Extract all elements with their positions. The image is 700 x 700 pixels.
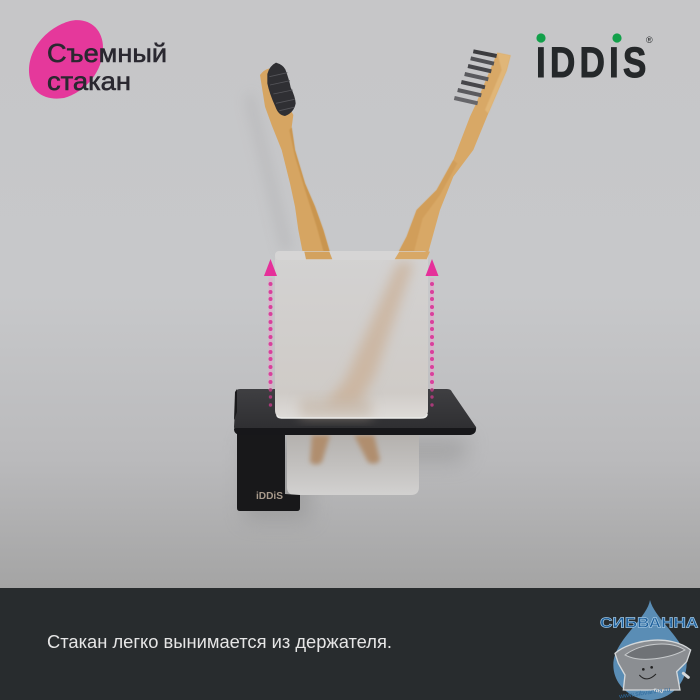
frosted glass upper part (275, 251, 428, 418)
brand logo: IDDIS: ® (646, 35, 653, 45)
toothbrush left (260, 63, 332, 261)
wall bracket (237, 433, 300, 511)
footer band (0, 588, 700, 700)
glass rim and wood stems at rim (275, 251, 430, 260)
pink blob accent (29, 20, 103, 99)
heading: Съемный (47, 38, 167, 68)
bracket logo: iDDiS (256, 490, 283, 502)
heading (47, 38, 167, 96)
watermark: Sibvanna logo (600, 600, 698, 700)
product shadows on wall (245, 90, 470, 520)
footer caption: Стакан легко вынимается из держателя. (47, 632, 392, 652)
arrow left: lift up (264, 259, 277, 407)
brand logo: IDDIS: IDDIS (536, 39, 651, 87)
holder shelf plate (234, 389, 476, 435)
arrow right: lift up (426, 259, 438, 407)
watermark: Sibvanna logo: СИБВАННА (600, 616, 698, 632)
toothbrush right (394, 51, 511, 261)
watermark: Sibvanna logo: www.sibvanna.ru (618, 686, 671, 700)
frosted glass lower part (287, 435, 419, 495)
heading: стакан (47, 66, 131, 96)
